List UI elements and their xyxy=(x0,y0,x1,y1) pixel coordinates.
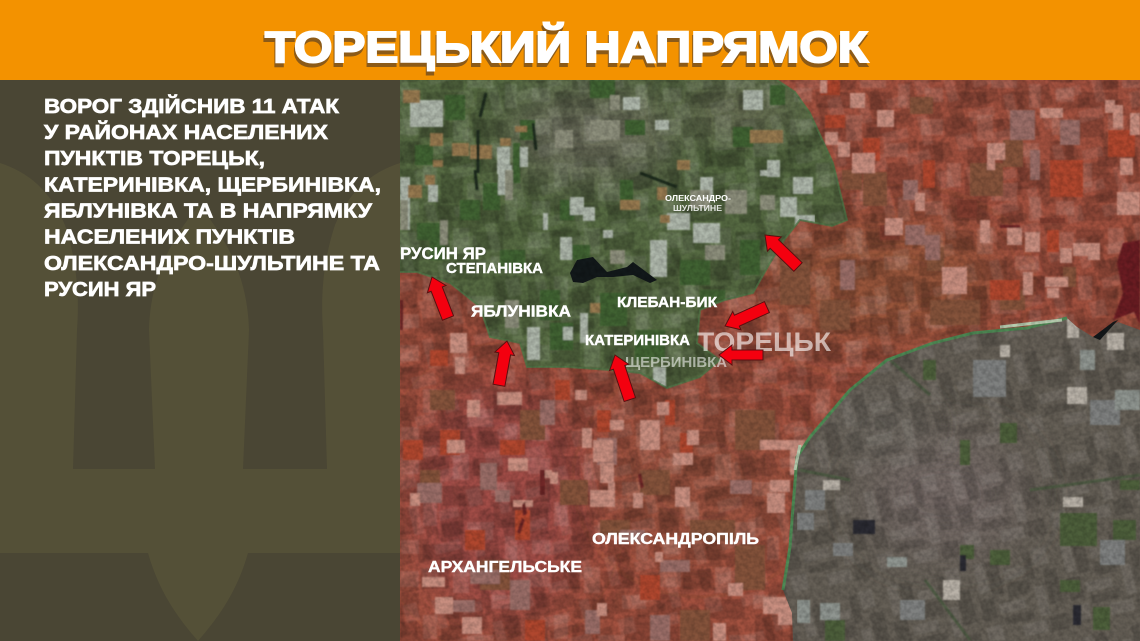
map labels xyxy=(400,194,832,576)
label: Kleban-Byk: КЛЕБАН-БИК xyxy=(617,295,717,311)
dark red reservoir xyxy=(1113,240,1140,325)
reservoir xyxy=(570,257,657,283)
text block: attack summary xyxy=(44,94,381,301)
text block: attack summary: ПУНКТІВ ТОРЕЦЬК, xyxy=(44,147,265,170)
attack arrows xyxy=(423,228,805,403)
label: Oleksandro-Shultyne: ОЛЕКСАНДРО- xyxy=(665,194,731,203)
arrow: toward Toretsk south xyxy=(719,345,763,365)
text block: attack summary: ЯБЛУНІВКА ТА В НАПРЯМКУ xyxy=(44,200,372,222)
arrow: toward Katerynivka xyxy=(609,354,636,402)
label: Oleksandropil: ОЛЕКСАНДРОПІЛЬ xyxy=(592,531,759,548)
label: Rusyn Yar: РУСИН ЯР xyxy=(400,244,486,263)
text block: attack summary: НАСЕЛЕНИХ ПУНКТІВ xyxy=(44,226,295,248)
label: Shcherbynivka: ЩЕРБИНІВКА xyxy=(625,355,728,371)
label: Katerynivka: КАТЕРИНІВКА xyxy=(585,333,691,349)
header bar xyxy=(0,0,1140,80)
text block: attack summary: ВОРОГ ЗДІЙСНИВ 11 АТАК xyxy=(44,94,340,118)
Donetsk area (grey) xyxy=(780,310,1140,641)
label: Oleksandro-Shultyne xyxy=(665,195,731,211)
unoccupied territory (green) xyxy=(400,80,860,390)
text block: attack summary: ОЛЕКСАНДРО-ШУЛЬТИНЕ ТА xyxy=(44,252,380,275)
arrow: toward Toretsk north xyxy=(724,301,770,330)
noise texture xyxy=(400,80,1140,641)
arrow: toward Yablunivka xyxy=(492,340,516,387)
title: ТОРЕЦЬКИЙ НАПРЯМОК xyxy=(265,21,868,72)
label: Yablunivka: ЯБЛУНІВКА xyxy=(471,304,571,320)
label: Toretsk: ТОРЕЦЬК xyxy=(697,327,832,357)
label: Stepanivka: СТЕПАНІВКА xyxy=(446,261,544,277)
arrow: toward Oleksandro-Shultyne xyxy=(764,234,803,272)
label: Arkhanhelske: АРХАНГЕЛЬСЬКЕ xyxy=(428,559,582,576)
text block: attack summary: КАТЕРИНІВКА, ЩЕРБИНІВКА, xyxy=(44,174,381,196)
panel: attack summary xyxy=(0,80,400,641)
panel: satellite map xyxy=(400,80,1140,641)
arrow: toward Rusyn Yar xyxy=(426,276,454,321)
icon: faint trident watermark xyxy=(0,80,400,641)
occupied territory (red) xyxy=(400,80,1140,641)
text block: attack summary: РУСИН ЯР xyxy=(44,278,156,301)
text block: attack summary: У РАЙОНАХ НАСЕЛЕНИХ xyxy=(44,120,328,144)
label: Oleksandro-Shultyne: ШУЛЬТИНЕ xyxy=(673,204,723,213)
